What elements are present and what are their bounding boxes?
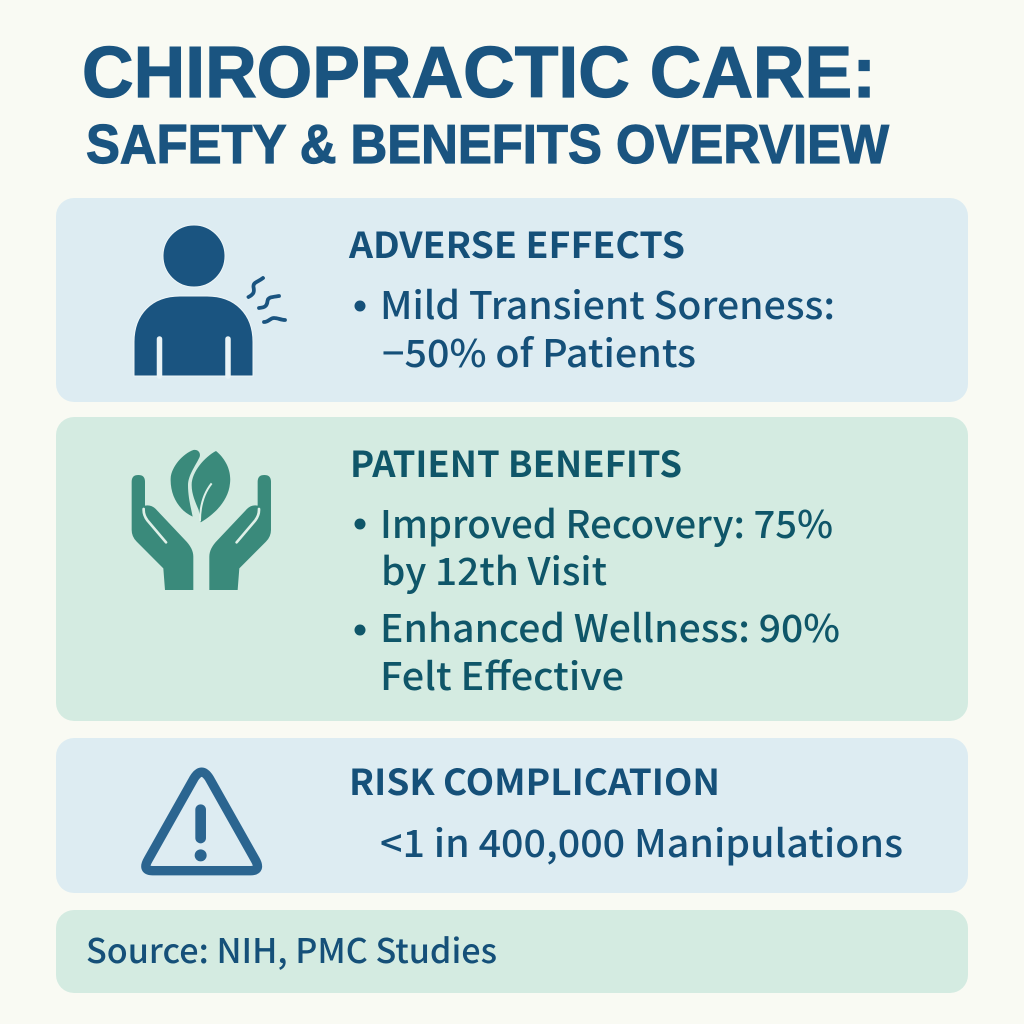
- bullet: wellness: Enhanced Wellness: 90%: [380, 598, 840, 653]
- subtitle: SAFETY & BENEFITS OVERVIEW: [86, 113, 889, 175]
- source text: Source: NIH, PMC Studies: [86, 924, 497, 973]
- panel: adverse effects: [56, 198, 968, 402]
- icon: warning triangle: [146, 772, 258, 871]
- bullet: soreness: [354, 275, 835, 378]
- heading: adverse effects: ADVERSE EFFECTS: [348, 217, 685, 269]
- panel: source: [56, 910, 968, 993]
- bullet: wellness: Felt Effective: [380, 646, 624, 701]
- bullet: recovery: by 12th Visit: [381, 541, 607, 596]
- bullet: soreness: −50% of Patients: [382, 323, 696, 378]
- title: CHIROPRACTIC CARE:: [82, 32, 876, 113]
- icon: hands holding leaf: [132, 450, 271, 590]
- panel: risk complication: [56, 738, 968, 893]
- icon: person with soreness: [134, 225, 285, 376]
- bullet: recovery: Improved Recovery: 75%: [380, 494, 833, 549]
- heading: patient benefits: PATIENT BENEFITS: [350, 436, 682, 488]
- heading: risk complication: RISK COMPLICATION: [349, 754, 720, 806]
- panel: patient benefits: [56, 417, 968, 721]
- risk statistic: <1 in 400,000 Manipulations: [380, 813, 903, 868]
- bullet: wellness: [354, 598, 840, 701]
- bullet: soreness: Mild Transient Soreness:: [380, 275, 835, 330]
- bullet: recovery: [354, 494, 833, 596]
